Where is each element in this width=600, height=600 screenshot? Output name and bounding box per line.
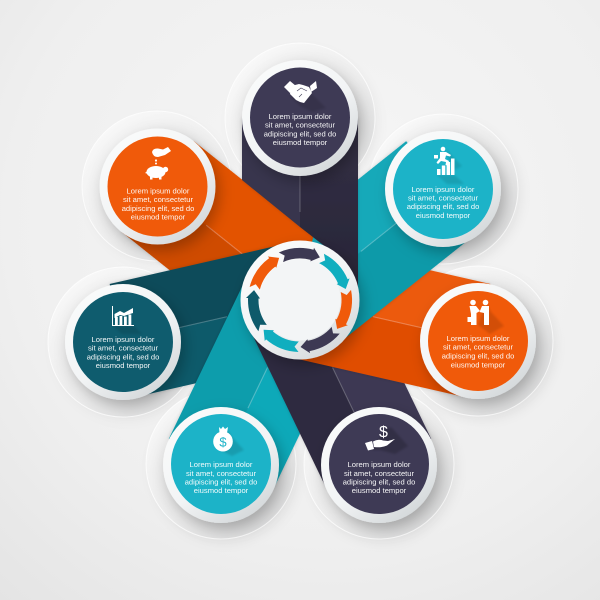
text block: adipiscing elit, sed do <box>343 477 415 486</box>
arrow ring <box>245 248 356 356</box>
icon: runner and bars <box>434 147 464 184</box>
text block: Lorem ipsum dolor <box>92 335 155 344</box>
text block: Lorem ipsum dolor <box>269 112 332 121</box>
halo discs behind nodes <box>48 43 557 544</box>
text block: eiusmod tempor <box>96 361 151 370</box>
icon: business partners <box>468 300 504 334</box>
icon: coin and piggy bank <box>145 147 171 180</box>
text block: Lorem ipsum dolor <box>412 185 475 194</box>
strip: teal lower left <box>169 275 352 489</box>
text block: Lorem ipsum dolor <box>190 460 253 469</box>
strip: orange right <box>287 243 490 397</box>
text block: sit amet, consectetur <box>443 343 514 352</box>
strip: navy top <box>242 118 358 300</box>
text block: eiusmod tempor <box>273 138 328 147</box>
node: dark teal left <box>65 284 181 400</box>
text block <box>442 334 514 369</box>
text block <box>185 460 257 495</box>
text block: sit amet, consectetur <box>186 469 257 478</box>
text block: adipiscing elit, sed do <box>185 477 257 486</box>
text block: eiusmod tempor <box>451 360 506 369</box>
text block: Lorem ipsum dolor <box>447 334 510 343</box>
text block: adipiscing elit, sed do <box>87 352 159 361</box>
text block <box>407 185 479 220</box>
node: orange right <box>420 283 536 399</box>
text block: eiusmod tempor <box>131 212 186 222</box>
icon: growth chart <box>112 306 142 334</box>
icon: handshake <box>284 81 326 112</box>
text block: sit amet, consectetur <box>123 195 194 204</box>
text block: adipiscing elit, sed do <box>407 202 479 211</box>
node: navy lower right <box>321 407 437 523</box>
text block <box>343 460 415 495</box>
text block: adipiscing elit, sed do <box>264 130 336 138</box>
text block: Lorem ipsum dolor <box>127 186 190 196</box>
strip: orange upper left <box>122 141 336 345</box>
center hub <box>240 240 360 360</box>
icon: hand with dollar: $ <box>379 424 388 441</box>
text block: sit amet, consectetur <box>344 469 415 478</box>
text block: Lorem ipsum dolor <box>348 460 411 469</box>
node: navy top <box>242 60 358 176</box>
text block: sit amet, consectetur <box>408 194 479 203</box>
text block: eiusmod tempor <box>352 486 407 495</box>
text block: sit amet, consectetur <box>88 344 159 353</box>
strip: dark teal left <box>110 243 313 397</box>
node: teal upper right <box>385 131 501 247</box>
strip: navy lower right <box>248 275 431 489</box>
text block <box>264 112 336 147</box>
node: teal lower left <box>163 407 279 523</box>
text block: eiusmod tempor <box>416 211 471 220</box>
text block: adipiscing elit, sed do <box>122 204 194 213</box>
text block: adipiscing elit, sed do <box>442 351 514 360</box>
icon: money bag: $ <box>219 434 227 450</box>
strip: teal upper right <box>264 141 478 345</box>
text block <box>87 335 159 370</box>
node: orange upper left <box>100 128 216 244</box>
text block: sit amet, consectetur <box>265 121 336 130</box>
text block: eiusmod tempor <box>194 486 249 495</box>
text block <box>122 186 194 222</box>
